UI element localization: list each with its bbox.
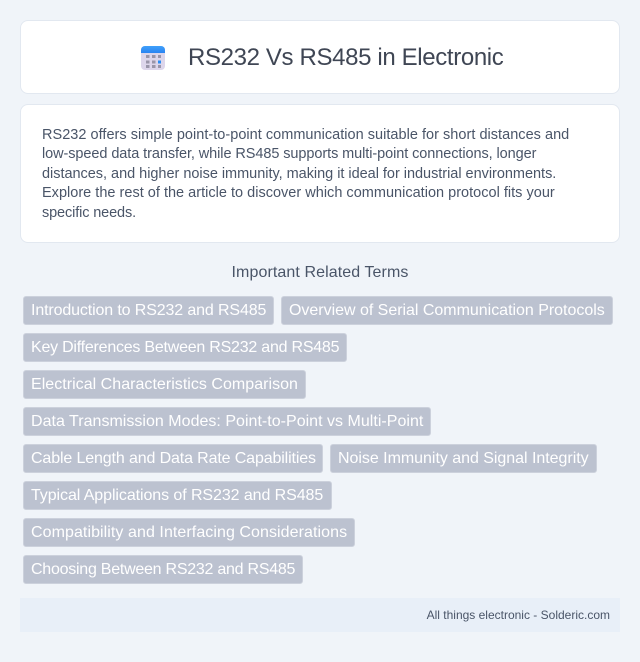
tag xyxy=(330,444,597,473)
tag: Introduction to RS232 and RS485 xyxy=(31,302,266,319)
summary text: RS232 offers simple point-to-point communication suitable for short distances and xyxy=(42,127,569,143)
tag xyxy=(23,518,355,547)
summary text xyxy=(42,127,569,221)
tag: Noise Immunity and Signal Integrity xyxy=(338,450,589,467)
tag xyxy=(23,370,306,399)
tag xyxy=(23,555,303,584)
summary text: Explore the rest of the article to discover which communication protocol fits your xyxy=(42,185,555,201)
summary text: distances, and higher noise immunity, making it ideal for industrial environments. xyxy=(42,166,556,182)
tag xyxy=(281,296,613,325)
summary text: low-speed data transfer, while RS485 supports multi-point connections, longer xyxy=(42,146,536,162)
summary text: specific needs. xyxy=(42,205,136,221)
tag: Typical Applications of RS232 and RS485 xyxy=(31,487,323,504)
title: RS232 Vs RS485 in Electronic xyxy=(188,44,503,71)
tag xyxy=(23,444,323,473)
panel: summary xyxy=(20,104,620,243)
tag: Key Differences Between RS232 and RS485 xyxy=(31,339,339,356)
header card xyxy=(20,20,620,94)
footer text: All things electronic - Solderic.com xyxy=(427,608,610,622)
tag: Cable Length and Data Rate Capabilities xyxy=(31,450,316,467)
tag list xyxy=(23,296,613,584)
icon: calendar xyxy=(141,46,165,70)
tag: Choosing Between RS232 and RS485 xyxy=(31,561,295,578)
tag xyxy=(23,333,347,362)
tag: Electrical Characteristics Comparison xyxy=(31,376,298,393)
tag: Data Transmission Modes: Point-to-Point vs Multi-Point xyxy=(31,413,423,430)
tag xyxy=(23,296,274,325)
tag xyxy=(23,481,332,510)
tag xyxy=(23,407,431,436)
tag: Overview of Serial Communication Protocols xyxy=(289,302,605,319)
heading: related terms: Important Related Terms xyxy=(232,264,408,281)
tag: Compatibility and Interfacing Considerations xyxy=(31,524,347,541)
footer bar xyxy=(20,598,620,632)
